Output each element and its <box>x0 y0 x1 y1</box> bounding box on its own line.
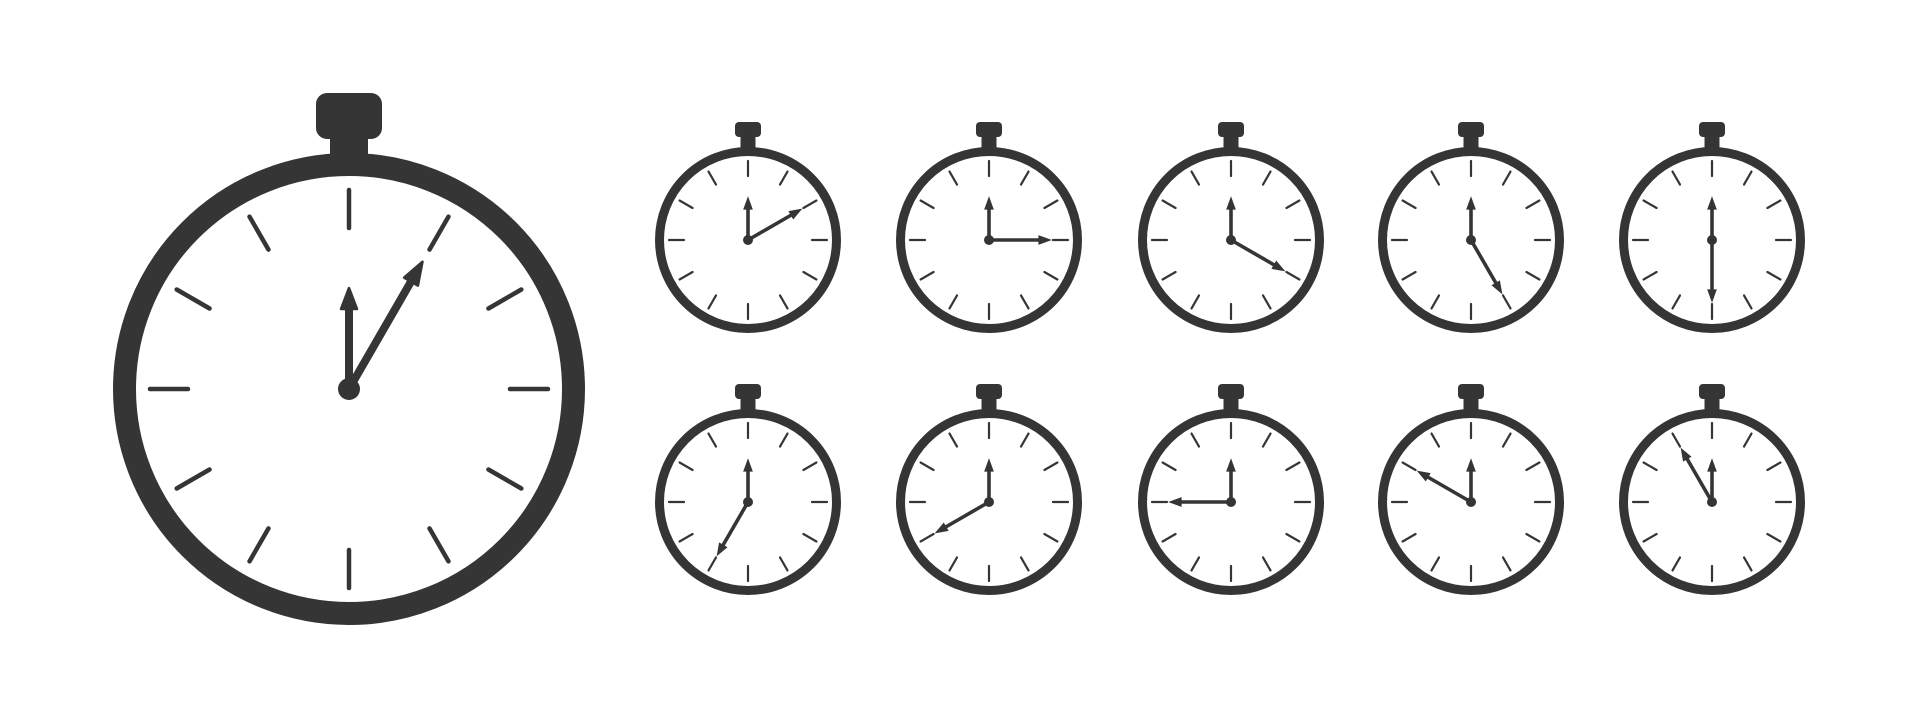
big stopwatch <box>124 93 574 614</box>
stopwatch 50 min <box>1382 384 1560 590</box>
stopwatch 45 min <box>1142 384 1320 590</box>
stopwatch 15 min <box>900 122 1078 328</box>
stopwatch 55 min <box>1624 384 1800 590</box>
stopwatch 40 min <box>900 384 1078 590</box>
stopwatch 35 min <box>660 384 836 590</box>
stopwatch 10 min <box>660 122 836 328</box>
stopwatch 25 min <box>1382 122 1560 328</box>
stopwatch 30 min <box>1624 122 1800 328</box>
stopwatch 20 min <box>1142 122 1320 328</box>
